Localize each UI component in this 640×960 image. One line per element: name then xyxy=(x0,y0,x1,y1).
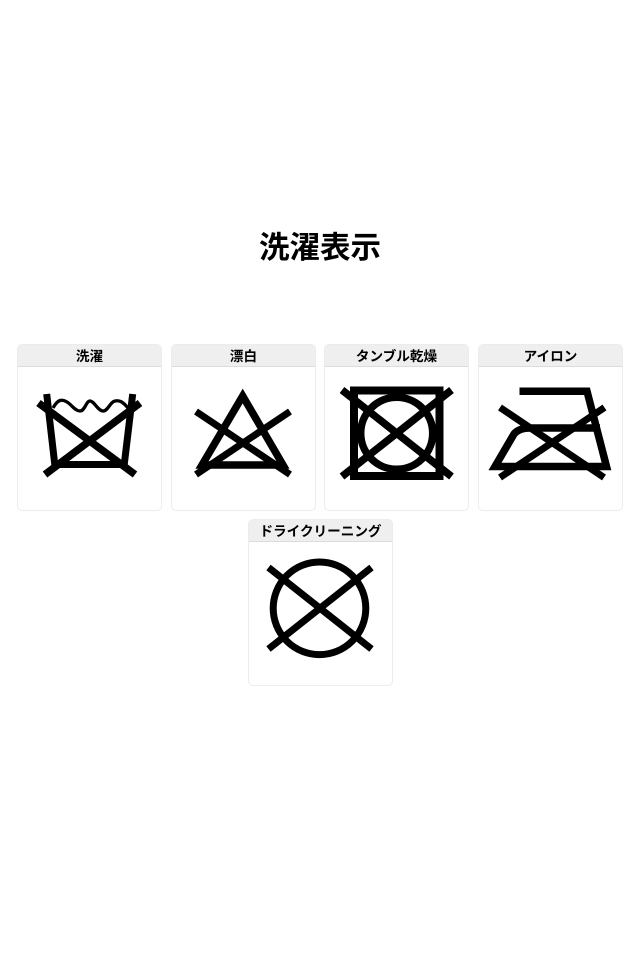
icon: bleach triangle crossed out xyxy=(194,388,292,478)
icon: iron crossed out xyxy=(488,388,612,480)
icon: dry cleaning circle crossed out xyxy=(266,558,374,658)
panel: tumble dry xyxy=(324,344,469,511)
panel: bleach xyxy=(171,344,316,511)
heading: tumble dry: タンブル乾燥 xyxy=(356,349,437,364)
heading: bleach: 漂白 xyxy=(230,349,257,364)
heading: tumble dry xyxy=(325,345,468,367)
panel: washing xyxy=(17,344,162,511)
panel: dry cleaning xyxy=(248,519,393,686)
title: 洗濯表示 xyxy=(259,231,381,265)
panel: ironing xyxy=(478,344,623,511)
icon: washing tub crossed out xyxy=(36,394,142,478)
heading: ironing: アイロン xyxy=(524,349,577,364)
heading: ironing xyxy=(479,345,622,367)
heading: dry cleaning xyxy=(249,520,392,542)
heading: dry cleaning: ドライクリーニング xyxy=(259,524,382,539)
icon: tumble dry square crossed out xyxy=(340,386,454,480)
heading: washing: 洗濯 xyxy=(76,349,103,364)
heading: bleach xyxy=(172,345,315,367)
heading: washing xyxy=(18,345,161,367)
